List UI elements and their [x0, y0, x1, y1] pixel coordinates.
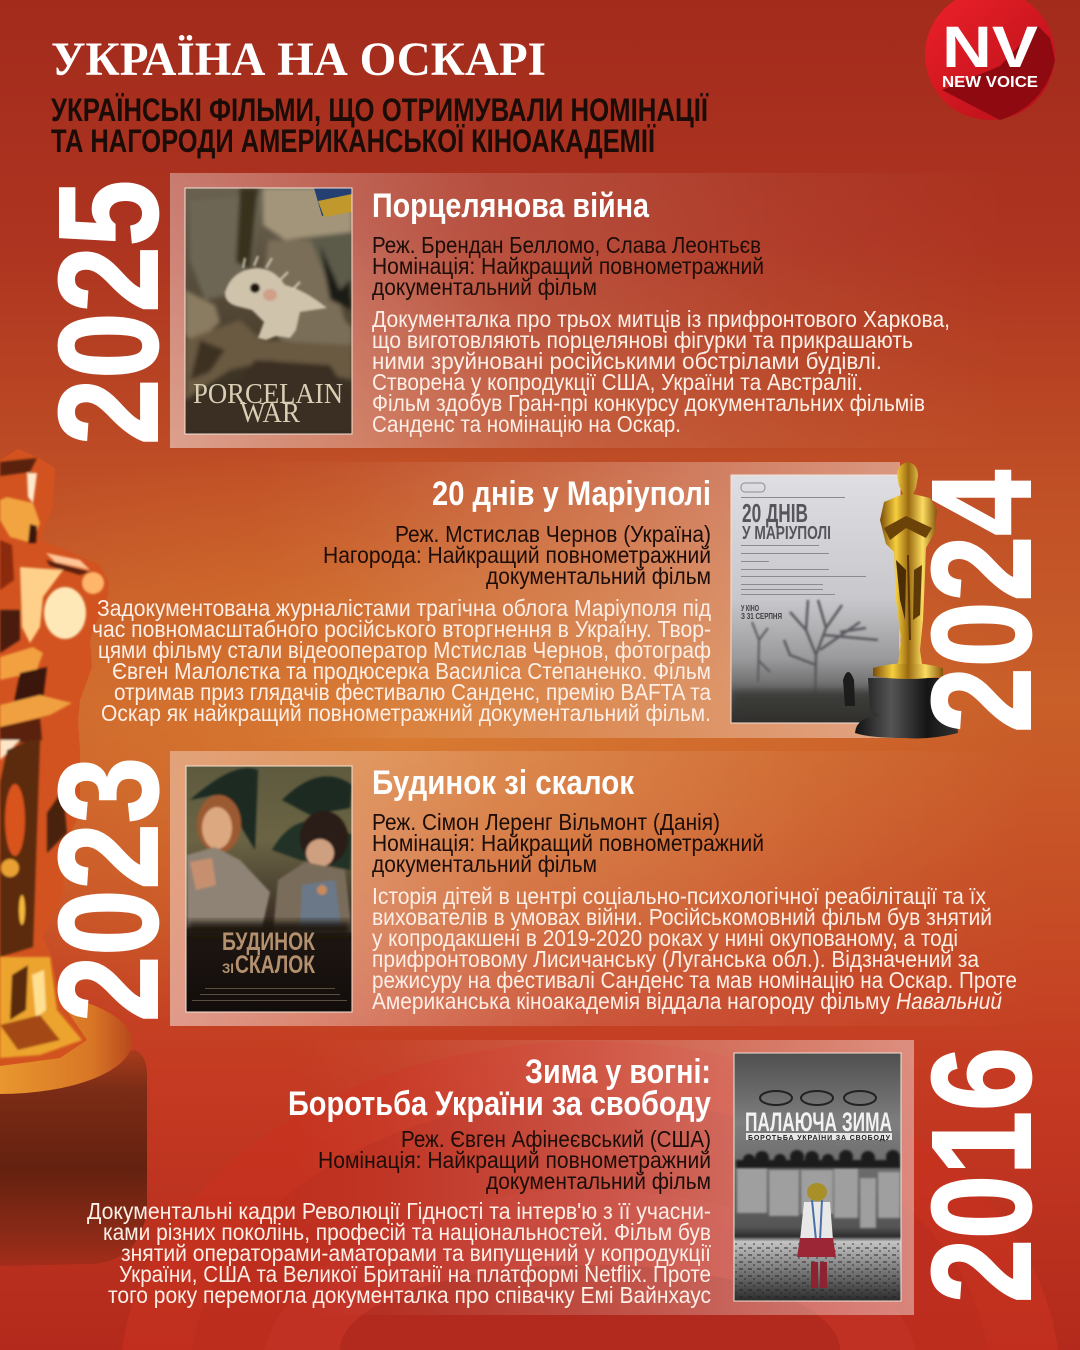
text block: Будинок зі скалок: Історія дітей в центрі соціально-психологічної реабілітації та їх: [372, 883, 986, 909]
text block: Будинок зі скалок: Американська кіноакадемія віддала нагороду фільму Навальний: [372, 988, 1002, 1014]
text block: 20 днів у Маріуполі: Нагорода: Найкращий повнометражний: [323, 542, 711, 568]
poster: House of Splinters: ЗІ: [222, 960, 234, 976]
text block: Зима у вогні: України, США та Великої Британії на платформі Netflix. Проте: [119, 1261, 711, 1287]
text block: Зима у вогні: Реж. Євген Афінеєвський (США): [401, 1126, 711, 1152]
title: УКРАЇНА НА ОСКАРІ: [51, 33, 546, 86]
year 2023: 2023: [29, 757, 187, 1022]
porcelain creature: [225, 256, 327, 340]
subtitle: УКРАЇНСЬКІ ФІЛЬМИ, ЩО ОТРИМУВАЛИ НОМІНАЦІЇ: [51, 92, 709, 128]
text block: Порцелянова війна: Документалка про трьох митців із прифронтового Харкова,: [372, 306, 950, 332]
poster: Porcelain War: [185, 188, 352, 434]
text block: Будинок зі скалок: у копродакшені в 2019-2020 роках у нині окупованому, а тоді: [372, 925, 958, 951]
poster: 20 days in Mariupol: У КІНО: [741, 604, 759, 613]
text block: Будинок зі скалок: Будинок зі скалок: [372, 764, 635, 802]
logo: NV New Voice: NV: [942, 15, 1038, 80]
pedestal: [0, 1050, 147, 1266]
text block: Будинок зі скалок: [372, 764, 1017, 1014]
poster: Winter on Fire: БОРОТЬБА УКРАЇНИ ЗА СВОБОДУ: [748, 1134, 891, 1142]
small Oscar statue: [855, 462, 958, 738]
text block: 20 днів у Маріуполі: документальний фільм: [486, 563, 711, 589]
text block: Зима у вогні: документальний фільм: [486, 1168, 711, 1194]
subtitle: [51, 92, 709, 159]
text block: Зима у вогні: Зима у вогні:: [525, 1053, 711, 1091]
poster title: ПАЛАЮЧА ЗИМА: [745, 1107, 892, 1137]
logo: NV New Voice: NEW VOICE: [942, 74, 1038, 91]
poster: 20 days in Mariupol: [731, 475, 900, 723]
logo: NV New Voice: [925, 0, 1055, 120]
text block: Будинок зі скалок: Реж. Сімон Леренг Вільмонт (Данія): [372, 809, 720, 835]
poster: House of Splinters: БУДИНОК: [222, 928, 316, 956]
text block: 20 днів у Маріуполі: [92, 475, 712, 726]
text block: Порцелянова війна: Фільм здобув Гран-прі конкурсу документальних фільмів: [372, 390, 925, 416]
big Oscar statue on the left: [0, 449, 147, 1266]
text block: Порцелянова війна: документальний фільм: [372, 274, 597, 300]
text block: Зима у вогні: [87, 1053, 712, 1308]
text block: Будинок зі скалок: вихователів в умовах війни. Російськомовний фільм був знятий: [372, 904, 992, 930]
text block: Порцелянова війна: Порцелянова війна: [372, 187, 650, 225]
text block: Зима у вогні: знятий операторами-аматорами та випущений у копродукції: [121, 1240, 712, 1266]
poster: 20 days in Mariupol: З 31 СЕРПНЯ: [741, 612, 782, 621]
poster title: PORCELAIN: [193, 379, 343, 410]
panel: 2016 card: [290, 1040, 914, 1315]
year 2016: 2016: [902, 1047, 1060, 1303]
year 2024: 2024: [902, 470, 1060, 733]
subtitle: ТА НАГОРОДИ АМЕРИКАНСЬКОЇ КІНОАКАДЕМІЇ: [51, 123, 656, 159]
poster: Winter on Fire: [734, 1053, 901, 1301]
statue body: [0, 449, 109, 1066]
text block: Будинок зі скалок: документальний фільм: [372, 851, 597, 877]
text block: Зима у вогні: Номінація: Найкращий повнометражний: [318, 1147, 711, 1173]
text block: Порцелянова війна: що виготовляють порцелянові фігурки та прикрашають: [372, 327, 913, 353]
text block: Порцелянова війна: Реж. Брендан Белломо, Слава Леонтьєв: [372, 232, 761, 258]
text block: 20 днів у Маріуполі: 20 днів у Маріуполі: [432, 475, 711, 513]
text block: Порцелянова війна: [372, 187, 950, 437]
text block: Порцелянова війна: Санденс та номінацію на Оскар.: [372, 411, 681, 437]
panel: 2024 card: [250, 462, 900, 738]
poster frames: [185, 188, 901, 1301]
text block: 20 днів у Маріуполі: час повномасштабного російського вторгнення в Україну. Твор-: [92, 616, 711, 642]
pedestal disc: [0, 990, 132, 1094]
text block: 20 днів у Маріуполі: Задокументована журналістами трагічна облога Маріуполя під: [97, 595, 712, 621]
text block: Порцелянова війна: Створена у копродукції США, України та Австралії.: [372, 369, 863, 395]
text block: Зима у вогні: ками різних поколінь, професій та національностей. Фільм був: [103, 1219, 711, 1245]
text block: 20 днів у Маріуполі: отримав приз глядачів фестивалю Санденс, премію BAFTA та: [114, 679, 711, 705]
text block: Будинок зі скалок: прифронтовому Лисичанську (Луганська обл.). Відзначений за: [372, 946, 979, 972]
year 2025: 2025: [29, 180, 187, 445]
text block: Будинок зі скалок: Номінація: Найкращий повнометражний: [372, 830, 764, 856]
text block: 20 днів у Маріуполі: Реж. Мстислав Чернов (Україна): [395, 521, 711, 547]
text block: Порцелянова війна: ними зруйновані російськими обстрілами будівлі.: [372, 348, 882, 374]
poster: House of Splinters: [186, 766, 352, 1012]
panel: 2025 card: [170, 173, 1010, 448]
poster: 20 days in Mariupol: У МАРІУПОЛІ: [742, 523, 831, 543]
text block: Зима у вогні: того року перемогла документалка про співачку Емі Вайнхаус: [108, 1282, 711, 1308]
text block: Зима у вогні: Боротьба України за свободу: [288, 1085, 711, 1123]
text block: Будинок зі скалок: режисуру на фестивалі Санденс та мав номінацію на Оскар. Проте: [372, 967, 1017, 993]
poster: 20 days in Mariupol: 20 ДНІВ: [742, 498, 808, 528]
text block: 20 днів у Маріуполі: цями фільму стали відеооператор Мстислав Чернов, фотограф: [98, 637, 711, 663]
poster: Porcelain War: WAR: [240, 398, 300, 429]
poster: House of Splinters: СКАЛОК: [235, 951, 316, 979]
text block: 20 днів у Маріуполі: Євген Малолєтка та продюсерка Василіса Степаненко. Фільм: [112, 658, 711, 684]
text block: Зима у вогні: Документальні кадри Революції Гідності та інтерв'ю з її учасни-: [87, 1198, 711, 1224]
text block: 20 днів у Маріуполі: Оскар як найкращий повнометражний документальний фільм.: [101, 700, 711, 726]
text block: Порцелянова війна: Номінація: Найкращий повнометражний: [372, 253, 764, 279]
panel: 2023 card: [170, 751, 1040, 1026]
